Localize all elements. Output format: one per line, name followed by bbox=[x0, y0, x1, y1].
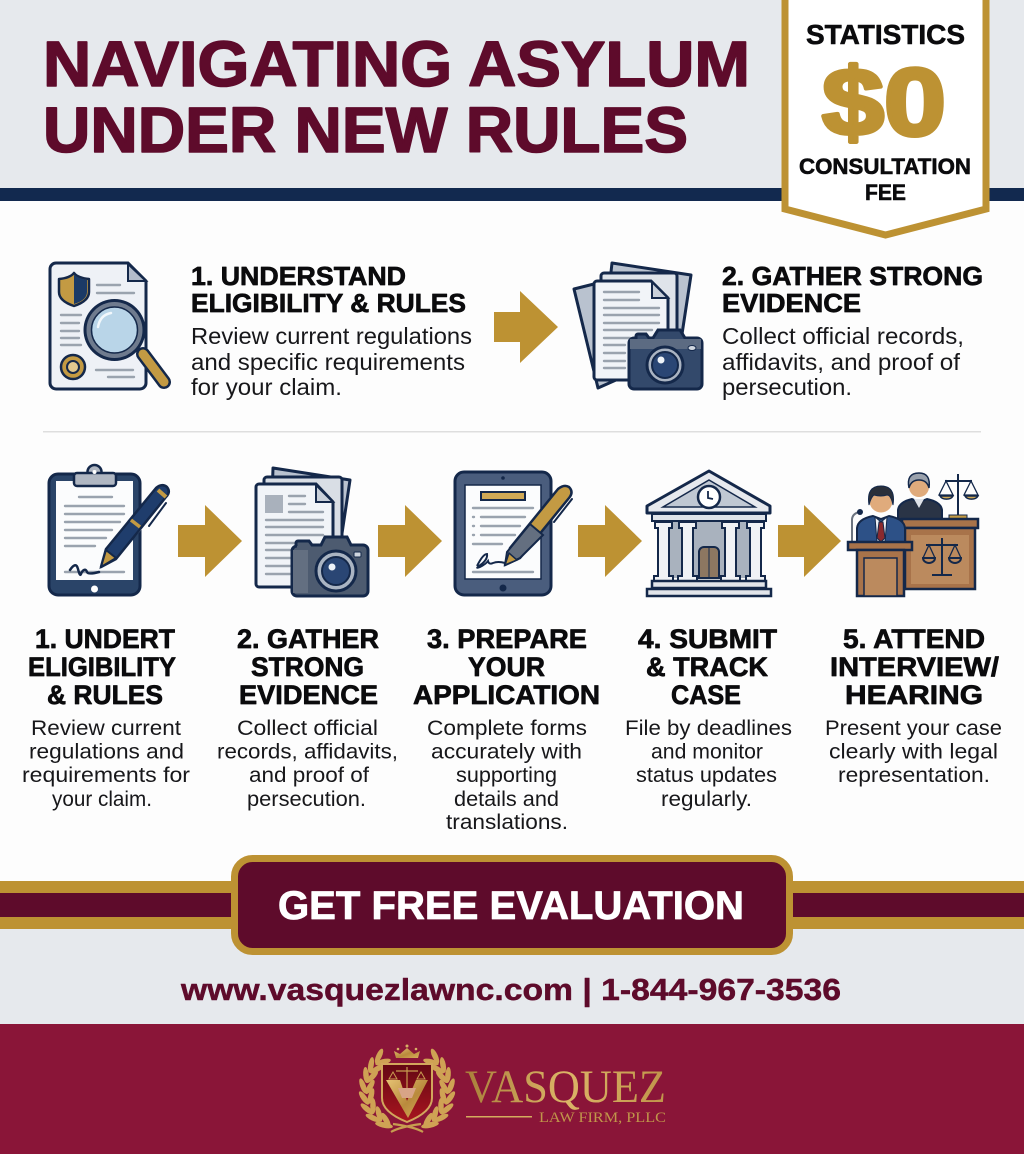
icon: clipboard and pen bbox=[49, 465, 169, 595]
badge: $0 consultation fee: STATISTICS bbox=[806, 19, 965, 50]
step 1 text (top): Review current regulations bbox=[191, 323, 472, 349]
badge: $0 consultation fee: FEE bbox=[865, 180, 906, 205]
step 5 column: clearly with legal bbox=[829, 740, 998, 764]
icon: courtroom bbox=[848, 473, 978, 596]
step 1 text (top): ELIGIBILITY & RULES bbox=[191, 288, 466, 318]
lower contact band bbox=[0, 929, 1024, 1024]
step 1 column: your claim. bbox=[52, 787, 152, 811]
footer band bbox=[0, 1024, 1024, 1154]
title: UNDER NEW RULES bbox=[43, 94, 688, 166]
step 5 column: HEARING bbox=[845, 680, 983, 710]
logo: Vasquez Law Firm: VASQUEZ bbox=[465, 1061, 666, 1113]
step 1 text (top): 1. UNDERSTAND bbox=[191, 261, 406, 291]
step 2 column: records, affidavits, bbox=[217, 740, 398, 764]
icon: courthouse bbox=[647, 471, 771, 596]
step 3 column: details and bbox=[454, 787, 559, 811]
call to action banner: GET FREE EVALUATION bbox=[278, 884, 744, 928]
step 2 column: STRONG bbox=[251, 652, 364, 682]
step 4 column: regularly. bbox=[661, 787, 752, 811]
step 2 text (top): Collect official records, bbox=[722, 323, 964, 349]
step 1 column: & RULES bbox=[47, 680, 163, 710]
step 3 column: YOUR bbox=[468, 652, 545, 682]
step 2 text (top): persecution. bbox=[722, 374, 852, 400]
step 1 column: requirements for bbox=[22, 763, 190, 787]
step 4 column bbox=[625, 624, 792, 811]
contact line: www.vasquezlawnc.com | 1-844-967-3536 bbox=[180, 972, 841, 1007]
step 2 column: 2. GATHER bbox=[237, 624, 379, 654]
step 2 text (top): affidavits, and proof of bbox=[722, 349, 960, 375]
arrow bbox=[494, 291, 558, 363]
step 4 column: and monitor bbox=[651, 740, 763, 764]
step 1 column bbox=[22, 624, 190, 811]
title: NAVIGATING ASYLUM bbox=[43, 28, 750, 100]
step 4 column: 4. SUBMIT bbox=[638, 624, 777, 654]
step 4 column: File by deadlines bbox=[625, 716, 792, 740]
arrow bbox=[178, 505, 242, 577]
step 3 column: APPLICATION bbox=[413, 680, 600, 710]
step 5 column bbox=[825, 624, 1002, 787]
step 3 column: accurately with bbox=[431, 740, 582, 764]
step 3 column: supporting bbox=[456, 763, 557, 787]
step 1 column: Review current bbox=[31, 716, 181, 740]
icon: document with magnifier bbox=[50, 263, 164, 389]
step 3 column: translations. bbox=[446, 810, 568, 834]
arrow bbox=[778, 505, 841, 577]
header band bbox=[0, 0, 1024, 201]
badge: $0 consultation fee: $0 bbox=[822, 49, 946, 156]
arrow bbox=[378, 505, 442, 577]
step 2 text (top): EVIDENCE bbox=[722, 288, 861, 318]
title bbox=[43, 28, 750, 166]
step 1 column: regulations and bbox=[29, 740, 184, 764]
step 3 column: 3. PREPARE bbox=[427, 624, 587, 654]
step 2 column: persecution. bbox=[247, 787, 366, 811]
step 2 column: Collect official bbox=[237, 716, 378, 740]
step 2 column: EVIDENCE bbox=[239, 680, 378, 710]
arrow bbox=[578, 505, 642, 577]
badge: $0 consultation fee: CONSULTATION bbox=[799, 154, 971, 179]
step 5 column: 5. ATTEND bbox=[843, 624, 985, 654]
call to action banner bbox=[0, 858, 1024, 952]
step 1 text (top) bbox=[191, 261, 472, 400]
step 2 column bbox=[217, 624, 398, 811]
step 2 text (top) bbox=[722, 261, 983, 400]
logo: Vasquez Law Firm: LAW FIRM, PLLC bbox=[539, 1110, 666, 1126]
step 5 column: representation. bbox=[838, 763, 990, 787]
step 1 column: ELIGIBILITY bbox=[28, 652, 176, 682]
step 5 column: Present your case bbox=[825, 716, 1002, 740]
step 1 text (top): for your claim. bbox=[191, 374, 342, 400]
logo: Vasquez Law Firm bbox=[357, 1044, 666, 1132]
step 3 column bbox=[413, 624, 600, 834]
step 5 column: INTERVIEW/ bbox=[830, 652, 1000, 682]
step 3 column: Complete forms bbox=[427, 716, 587, 740]
step 1 text (top): and specific requirements bbox=[191, 349, 465, 375]
step 1 column: 1. UNDERT bbox=[35, 624, 175, 654]
icon: tablet and pen bbox=[455, 472, 572, 595]
step 2 text (top): 2. GATHER STRONG bbox=[722, 261, 983, 291]
step 4 column: CASE bbox=[671, 680, 741, 710]
icon: documents and camera bbox=[256, 468, 368, 596]
step 2 column: and proof of bbox=[249, 763, 369, 787]
step 4 column: & TRACK bbox=[646, 652, 768, 682]
step 4 column: status updates bbox=[636, 763, 777, 787]
icon: papers and camera bbox=[574, 263, 702, 389]
badge: $0 consultation fee bbox=[785, 0, 986, 235]
